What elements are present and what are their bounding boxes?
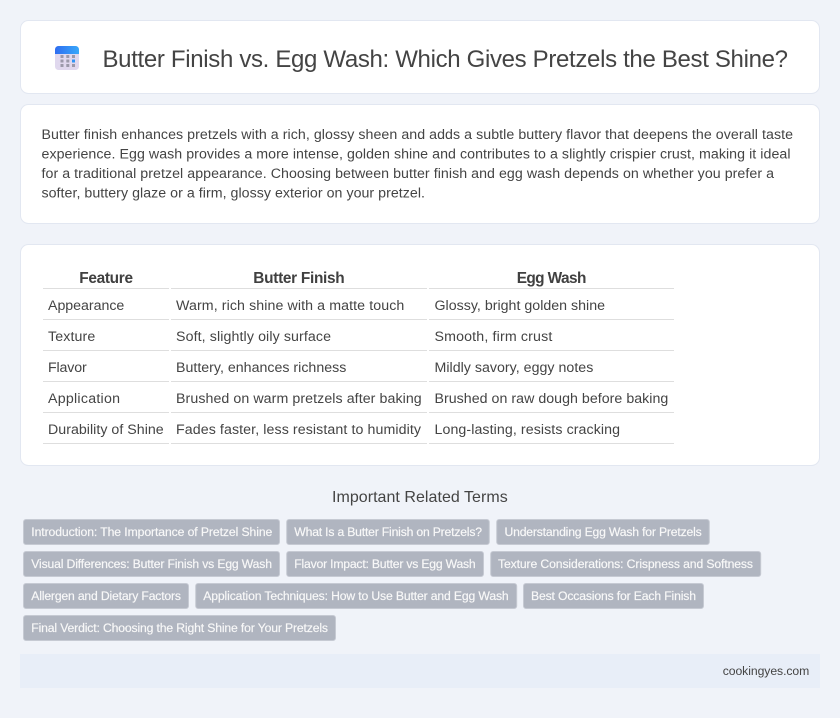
footer source: cookingyes.com — [723, 664, 809, 678]
row: flavor: Buttery, enhances richness — [176, 360, 346, 376]
heading: important related terms: Important Related Terms — [332, 489, 508, 506]
tag row 3: Best Occasions for Each Finish — [531, 589, 696, 603]
row: texture — [48, 329, 552, 345]
row: application: Brushed on raw dough before baking — [434, 391, 668, 407]
table header row: Feature — [79, 270, 133, 287]
text block: summary: experience. Egg wash provides a more intense, golden shine and contributes to a slightly crispier crust, making it ideal — [42, 146, 790, 162]
row: flavor: Flavor — [48, 360, 87, 376]
panel: related term tags — [24, 520, 761, 640]
tag row 1 — [24, 520, 709, 544]
tag row 2: Texture Considerations: Crispness and Softness — [498, 557, 753, 571]
row: application: Application — [48, 391, 120, 407]
row: texture: Smooth, firm crust — [434, 329, 552, 345]
tag row 3: Application Techniques: How to Use Butter and Egg Wash — [203, 589, 509, 603]
tag row 2: Visual Differences: Butter Finish vs Egg Wash — [31, 557, 272, 571]
text block: summary: for a traditional pretzel appearance. Choosing between butter finish and egg wash depends on whether you prefer a — [42, 166, 774, 182]
text block: summary: Butter finish enhances pretzels with a rich, glossy sheen and adds a subtle buttery flavor that deepens the overall taste — [42, 127, 793, 143]
table header row — [79, 270, 586, 287]
title: Butter Finish vs. Egg Wash: Which Gives Pretzels the Best Shine? — [102, 46, 788, 73]
row: flavor — [48, 360, 593, 376]
row: flavor: Mildly savory, eggy notes — [434, 360, 593, 376]
footer bar — [20, 654, 820, 688]
row: durability of shine: Fades faster, less resistant to humidity — [176, 422, 422, 438]
tag row 4: Final Verdict: Choosing the Right Shine for Your Pretzels — [31, 621, 328, 635]
table header row: Egg Wash — [517, 270, 586, 287]
tag row 2: Flavor Impact: Butter vs Egg Wash — [294, 557, 476, 571]
row: application: Brushed on warm pretzels after baking — [176, 391, 422, 407]
panel: comparison table — [20, 244, 820, 466]
table header row: Butter Finish — [253, 270, 345, 287]
row: durability of shine: Durability of Shine — [48, 422, 164, 438]
row: texture: Soft, slightly oily surface — [176, 329, 331, 345]
panel: summary paragraph — [20, 104, 820, 224]
row: appearance: Warm, rich shine with a matte touch — [176, 298, 404, 314]
row: application — [48, 391, 668, 407]
text block: summary — [42, 127, 793, 202]
tag row 4 — [24, 616, 336, 640]
row: durability of shine: Long-lasting, resists cracking — [434, 422, 620, 438]
panel: title header — [20, 20, 820, 94]
tag row 3 — [24, 584, 704, 608]
tag row 2 — [24, 552, 761, 576]
row: appearance: Appearance — [48, 298, 124, 314]
tag row 3: Allergen and Dietary Factors — [31, 589, 181, 603]
tag row 1: Introduction: The Importance of Pretzel Shine — [31, 525, 273, 539]
tag row 1: Understanding Egg Wash for Pretzels — [504, 525, 702, 539]
row: appearance — [48, 298, 605, 314]
row: appearance: Glossy, bright golden shine — [434, 298, 605, 314]
text block: summary: softer, buttery glaze or a firm, glossy exterior on your pretzel. — [42, 186, 425, 202]
row: durability of shine — [48, 422, 620, 438]
row: texture: Texture — [48, 329, 95, 345]
tag row 1: What Is a Butter Finish on Pretzels? — [294, 525, 482, 539]
icon: calendar — [55, 46, 79, 70]
